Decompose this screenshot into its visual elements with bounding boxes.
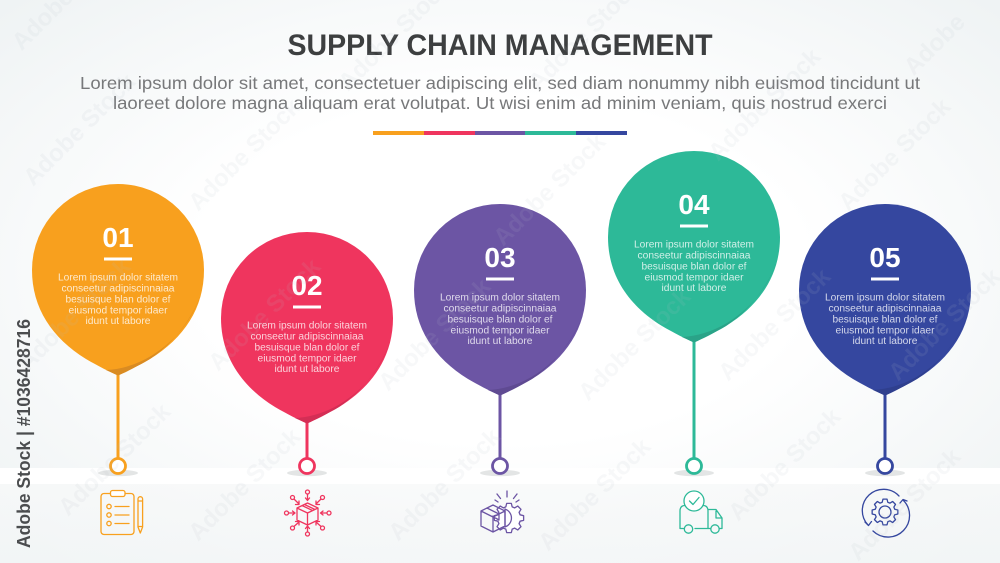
stock watermarks: Adobe Stock <box>13 253 137 376</box>
step 02 pin: Lorem ipsum dolor sitatem <box>247 320 367 332</box>
step 04 pin: 04 <box>678 189 710 220</box>
step 01 pin: Lorem ipsum dolor sitatem <box>58 272 178 284</box>
step 05 pin: Lorem ipsum dolor sitatem <box>825 292 945 304</box>
title: SUPPLY CHAIN MANAGEMENT <box>288 29 712 62</box>
stock watermarks: Adobe Stock <box>183 93 307 216</box>
step 04 pin: conseetur adipiscinnaiaa <box>638 250 751 262</box>
step 05 pin: conseetur adipiscinnaiaa <box>828 304 942 314</box>
stock watermarks: Adobe Stock <box>183 423 307 546</box>
subtitle text: Lorem ipsum dolor sit amet, consectetuer adipiscing elit, sed diam nonummy nibh euismod tincidunt ut <box>80 73 920 93</box>
stock side label: Adobe Stock | #1036428716 <box>13 319 34 548</box>
icon: delivery truck with check <box>680 491 722 533</box>
step 02 pin: conseetur adipiscinnaiaa <box>250 332 364 342</box>
step 02 pin <box>221 232 393 476</box>
multicolour divider <box>373 131 627 135</box>
stock watermarks: Adobe <box>899 9 971 81</box>
step 04 pin: besuisque blan dolor ef <box>641 262 747 272</box>
stock watermarks: Adobe Stock <box>203 253 327 376</box>
step 04 pin: idunt ut labore <box>662 283 727 294</box>
stock watermarks: Adobe Stock <box>713 263 837 386</box>
step 05 pin: eiusmod tempor idaer <box>836 326 935 336</box>
step 05 pin: besuisque blan dolor ef <box>832 314 938 326</box>
step 04 pin <box>608 151 780 476</box>
step 02 pin: idunt ut labore <box>274 364 340 375</box>
stock watermarks: Adobe Stock <box>488 128 612 251</box>
step 05 pin <box>799 204 971 476</box>
stock watermarks: Adobe Stock <box>18 68 142 191</box>
step 03 pin: besuisque blan dolor ef <box>447 314 553 326</box>
step 03 pin: Lorem ipsum dolor sitatem <box>440 292 560 304</box>
step 01 pin: conseetur adipiscinnaiaa <box>62 284 175 294</box>
floor band <box>0 468 1000 484</box>
step 03 pin: eiusmod tempor idaer <box>450 326 550 336</box>
stock watermarks: Adobe Stock <box>843 443 967 563</box>
stock watermarks: Adobe Stock <box>533 433 657 556</box>
step 03 pin: 03 <box>484 242 516 273</box>
subtitle text <box>80 73 920 113</box>
step 03 pin: conseetur adipiscinnaiaa <box>444 304 557 314</box>
step 05 pin: idunt ut labore <box>852 336 918 347</box>
stock watermarks: Adobe Stock <box>383 423 507 546</box>
step 04 pin: Lorem ipsum dolor sitatem <box>634 240 754 250</box>
step 02 pin: besuisque blan dolor ef <box>254 342 360 354</box>
step 03 pin <box>414 204 586 476</box>
step 01 pin <box>32 184 204 476</box>
stock watermarks: Adobe Stock <box>573 283 697 406</box>
step 01 pin: besuisque blan dolor ef <box>65 294 171 306</box>
stock watermarks: Adobe Stock <box>53 398 177 521</box>
stock watermarks: Adobe Stock <box>703 43 827 166</box>
step 04 pin: eiusmod tempor idaer <box>644 272 744 284</box>
step 02 pin: 02 <box>291 270 323 301</box>
icon: box with network arrows <box>284 490 331 536</box>
step 01 pin: idunt ut labore <box>86 316 151 327</box>
stock watermarks: Adobe Stock <box>833 93 957 216</box>
icon: gear with rotation arrows <box>862 489 910 537</box>
stock watermarks: Adobe Stock <box>373 273 497 396</box>
icon: clipboard checklist <box>101 490 143 534</box>
stock watermarks: Adobe Stock <box>723 403 847 526</box>
step 01 pin: eiusmod tempor idaer <box>68 306 168 316</box>
icon: package and gear <box>481 491 524 533</box>
step 05 pin: 05 <box>869 242 901 273</box>
subtitle text: laoreet dolore magna aliquam erat volutpat. Ut wisi enim ad minim veniam, quis nostrud exerci <box>113 93 887 113</box>
step 02 pin: eiusmod tempor idaer <box>258 354 357 364</box>
step 03 pin: idunt ut labore <box>468 336 533 347</box>
step 01 pin: 01 <box>102 222 134 253</box>
